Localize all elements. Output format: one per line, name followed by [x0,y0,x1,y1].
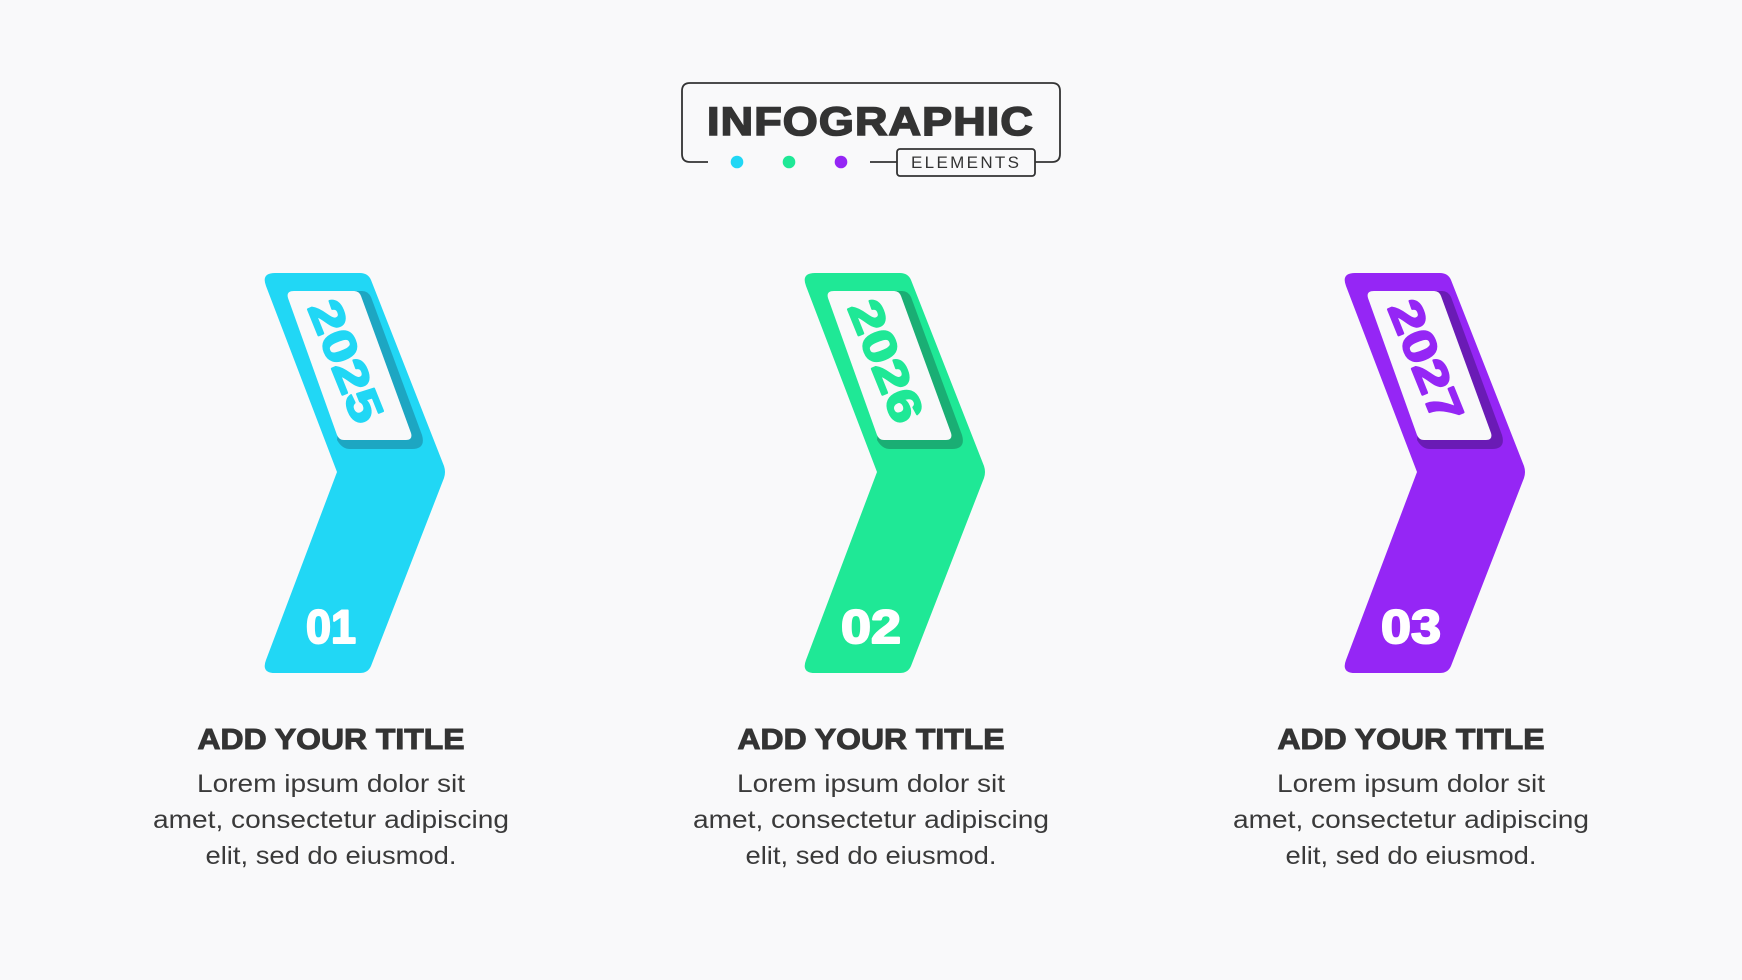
tab shadow 1 [337,291,423,449]
header frame [682,83,1060,162]
description 3 [1233,770,1589,870]
tab shadow 2 [877,291,963,449]
year tab 1 [288,291,411,440]
tab shadow 3 [1417,291,1503,449]
title 3: ADD YOUR TITLE [1278,724,1544,756]
description 2: elit, sed do eiusmod. [746,842,996,870]
legend dots [731,156,847,168]
subtitle box: ELEMENTS [911,153,1019,172]
number 03: 03 [1381,600,1441,653]
description 1: amet, consectetur adipiscing [153,806,509,834]
description 2: amet, consectetur adipiscing [693,806,1049,834]
number 01: 01 [306,600,356,653]
step 3 [1233,273,1589,870]
description 3: Lorem ipsum dolor sit [1277,770,1545,798]
number 02: 02 [841,600,901,653]
title: INFOGRAPHIC [707,100,1034,144]
step 2 [693,273,1049,870]
year 2027: 2027 [1378,292,1474,430]
chevron 2 [805,273,985,673]
description 2: Lorem ipsum dolor sit [737,770,1005,798]
description 3: elit, sed do eiusmod. [1286,842,1536,870]
step 1 [153,273,509,870]
description 2 [693,770,1049,870]
title 1: ADD YOUR TITLE [198,724,464,756]
subtitle box [897,149,1035,176]
description 1 [153,770,509,870]
title 2: ADD YOUR TITLE [738,724,1004,756]
header badge [682,83,1060,176]
year 2025: 2025 [298,292,394,430]
description 3: amet, consectetur adipiscing [1233,806,1589,834]
year tab 2 [828,291,951,440]
description 1: elit, sed do eiusmod. [206,842,456,870]
chevron 3 [1345,273,1525,673]
year 2026: 2026 [838,292,934,430]
year tab 3 [1368,291,1491,440]
description 1: Lorem ipsum dolor sit [197,770,465,798]
chevron 1 [265,273,445,673]
